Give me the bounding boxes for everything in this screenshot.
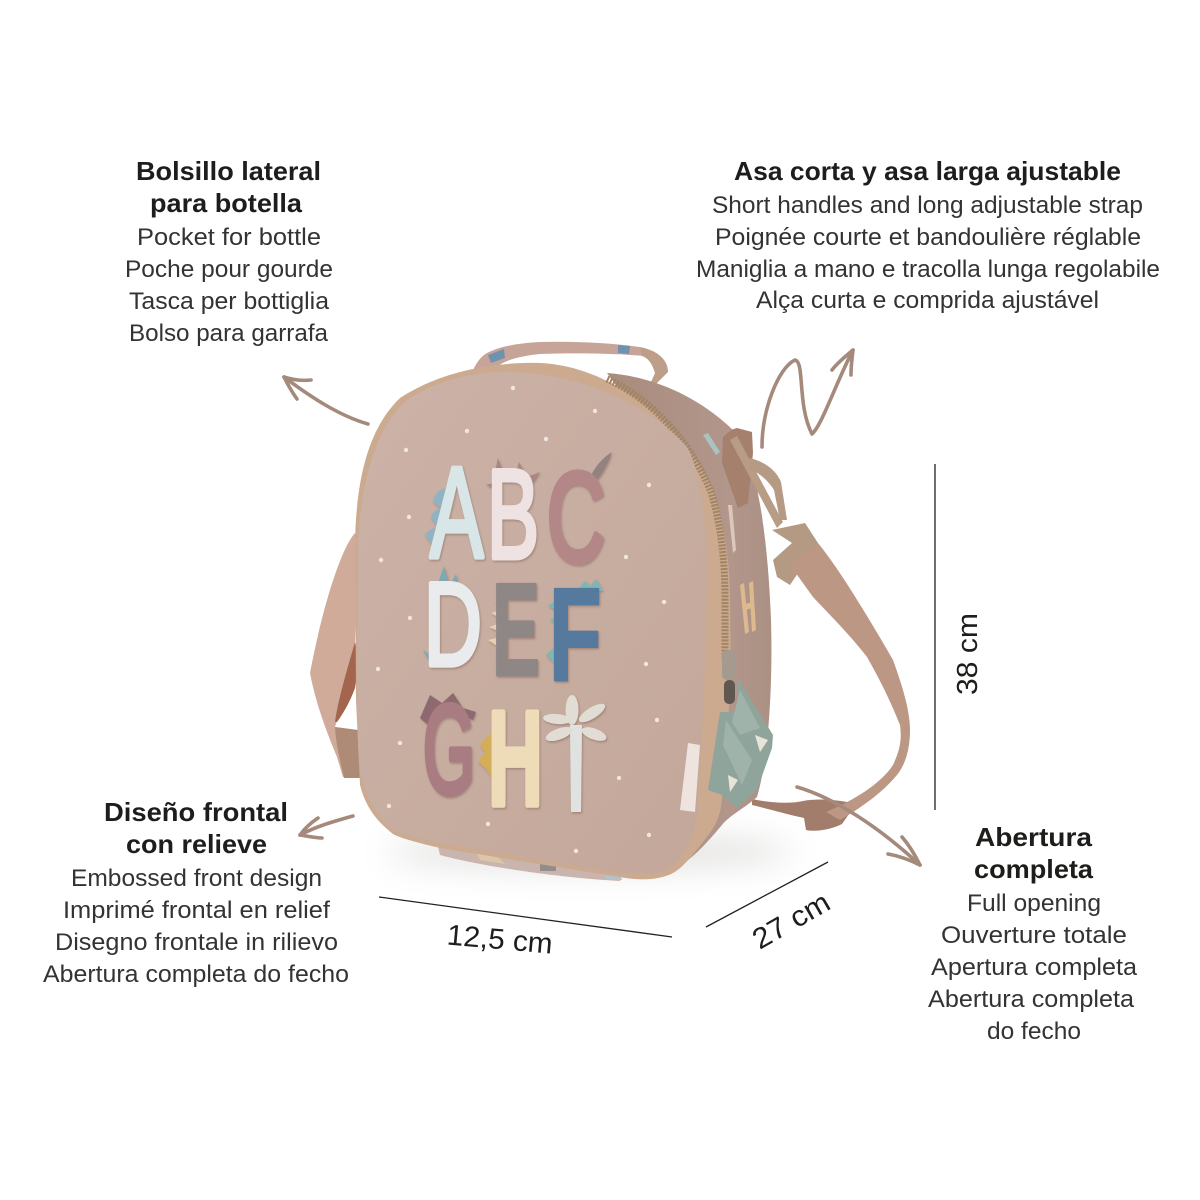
zipper teeth bbox=[607, 379, 725, 660]
text block: embossed front: Diseño frontal bbox=[104, 797, 288, 827]
arrow: to embossed front bbox=[300, 816, 353, 838]
arrow: squiggle to handle bbox=[762, 350, 853, 447]
text block: embossed front: Embossed front design bbox=[71, 865, 322, 892]
handle bbox=[473, 342, 702, 412]
arrow: to side pocket bbox=[284, 377, 368, 424]
text block: bottle pocket: para botella bbox=[150, 188, 303, 218]
text block: handles and strap: Short handles and long adjustable strap bbox=[712, 192, 1143, 219]
text block: full opening: Full opening bbox=[967, 890, 1101, 917]
text block: full opening: Apertura completa bbox=[931, 954, 1137, 981]
palm tree letter bbox=[543, 695, 608, 812]
text block: full opening: Ouverture totale bbox=[941, 922, 1127, 949]
text block: handles and strap: Poignée courte et bandoulière réglable bbox=[715, 224, 1141, 251]
text block: bottle pocket: Poche pour gourde bbox=[125, 256, 333, 283]
text block: embossed front bbox=[43, 797, 349, 988]
dimension: width 12,5 cm bbox=[379, 897, 672, 961]
letter decorations bbox=[420, 452, 612, 777]
letters A B C: B bbox=[487, 445, 539, 586]
text block: full opening: Abertura bbox=[975, 822, 1093, 852]
letters D E F bbox=[424, 556, 602, 708]
dimension: height 38 cm: 38 cm bbox=[952, 613, 984, 695]
back of carry strap bbox=[752, 799, 856, 831]
text block: full opening bbox=[928, 822, 1137, 1045]
letters A B C: A bbox=[430, 440, 484, 585]
text block: embossed front: con relieve bbox=[126, 829, 267, 859]
product photo: lunch bag bbox=[310, 342, 910, 881]
text block: bottle pocket: Pocket for bottle bbox=[137, 224, 321, 251]
side panel bbox=[607, 373, 771, 876]
side label tag bbox=[680, 743, 700, 812]
long strap bbox=[790, 543, 910, 820]
text block: handles and strap: Maniglia a mano e tracolla lunga regolabile bbox=[696, 256, 1160, 283]
text block: embossed front: Abertura completa do fecho bbox=[43, 961, 349, 988]
text block: embossed front: Imprimé frontal en relief bbox=[63, 897, 330, 924]
text block: bottle pocket: Bolso para garrafa bbox=[129, 320, 328, 347]
text block: bottle pocket: Bolsillo lateral bbox=[136, 156, 321, 186]
text block: full opening: completa bbox=[974, 854, 1094, 884]
side prints bbox=[703, 433, 756, 634]
text block: bottle pocket: Tasca per bottiglia bbox=[129, 288, 329, 315]
text block: handles and strap: Alça curta e comprida ajustável bbox=[756, 287, 1099, 314]
letters D E F: F bbox=[549, 560, 602, 708]
ground shadow bbox=[385, 834, 795, 870]
text block: bottle pocket bbox=[125, 156, 333, 347]
left strap bbox=[310, 533, 360, 778]
letters A B C: C bbox=[547, 448, 605, 588]
face stars bbox=[376, 386, 666, 853]
letters D E F: E bbox=[492, 556, 540, 704]
text block: full opening: do fecho bbox=[987, 1018, 1081, 1045]
text block: handles and strap bbox=[696, 156, 1160, 314]
dimension: depth 27 cm: 27 cm bbox=[747, 886, 836, 956]
letters G H bbox=[423, 681, 543, 835]
letters G H: H bbox=[488, 684, 543, 835]
text block: handles and strap: Asa corta y asa larga ajustable bbox=[734, 156, 1121, 186]
bottom panel bbox=[437, 843, 622, 881]
zipper pull and keychain bbox=[708, 650, 773, 808]
zipper band bbox=[355, 363, 731, 879]
letters D E F: D bbox=[424, 560, 482, 691]
text block: full opening: Abertura completa bbox=[928, 986, 1134, 1013]
text block: embossed front: Disegno frontale in rilievo bbox=[55, 929, 338, 956]
dimension: width 12,5 cm: 12,5 cm bbox=[446, 919, 554, 961]
letters G H: G bbox=[423, 681, 475, 820]
strap: buckle and carabiner bbox=[722, 428, 818, 585]
front face bbox=[357, 372, 707, 874]
embossed letters bbox=[420, 440, 612, 835]
letters A B C bbox=[430, 440, 605, 588]
arrow: to full opening bbox=[797, 787, 920, 865]
dimension: depth 27 cm bbox=[706, 862, 836, 956]
